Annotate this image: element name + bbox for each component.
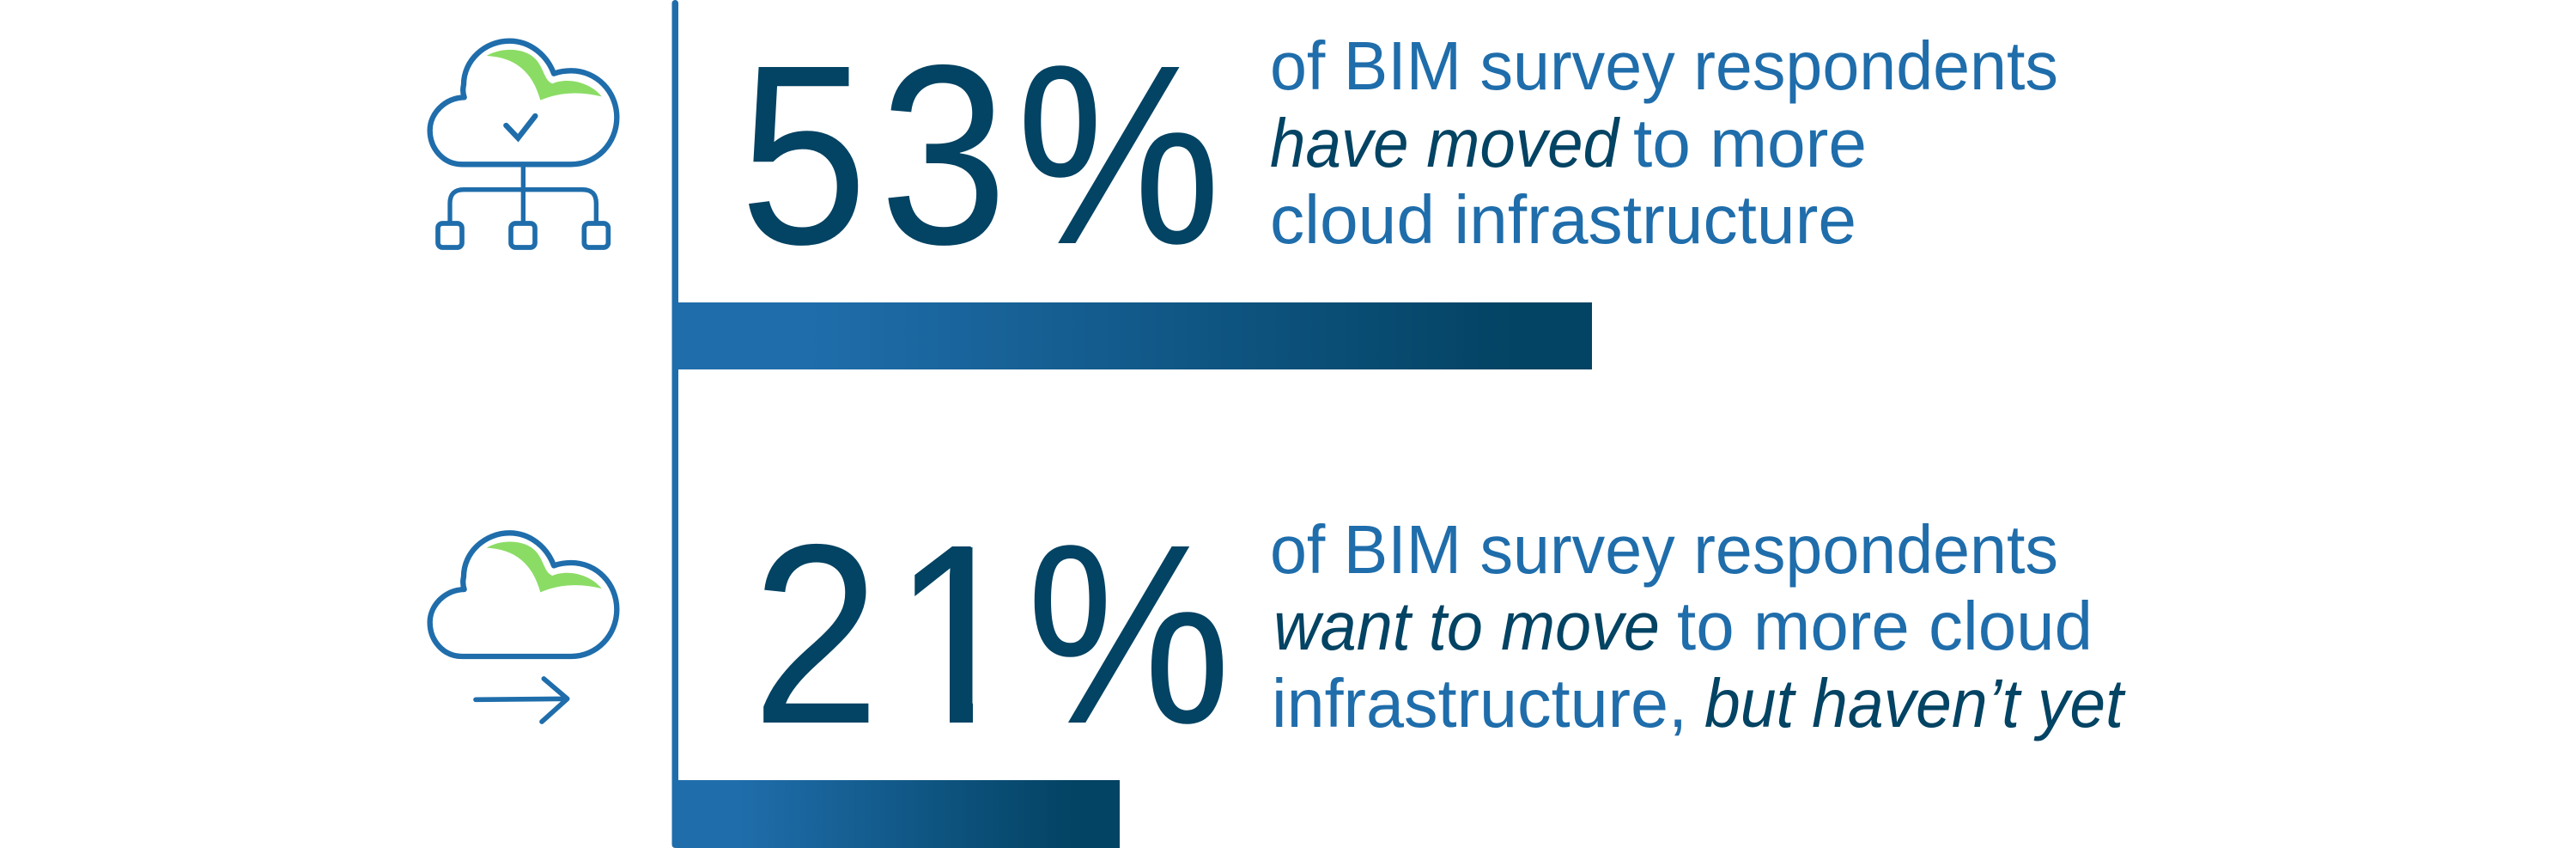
text: 21% description: want to move [1273,588,1660,664]
text: 53% description: have moved [1270,105,1620,181]
icon: cloud with arrow [430,533,617,722]
text: 53% description: to more [1633,105,1867,181]
bar: 21% [672,780,1120,848]
vertical axis line [671,0,678,848]
text: 53% description: cloud infrastructure [1270,181,1856,258]
text: 21% description: to more cloud [1677,588,2093,664]
text: 53% description [1270,27,2058,258]
bar: 53% [672,302,1592,369]
text: 53% description: of BIM survey respondents [1270,27,2058,104]
text: 21% description [1270,511,2126,741]
text: 21% description: infrastructure, [1272,665,1687,741]
text: 21% description: but haven’t yet [1704,665,2126,741]
statistic: 21%: 21% [752,491,1231,778]
statistic: 53%: 53% [739,12,1221,298]
icon: cloud with check and network nodes [430,41,617,247]
text: 21% description: of BIM survey respondents [1270,511,2058,588]
